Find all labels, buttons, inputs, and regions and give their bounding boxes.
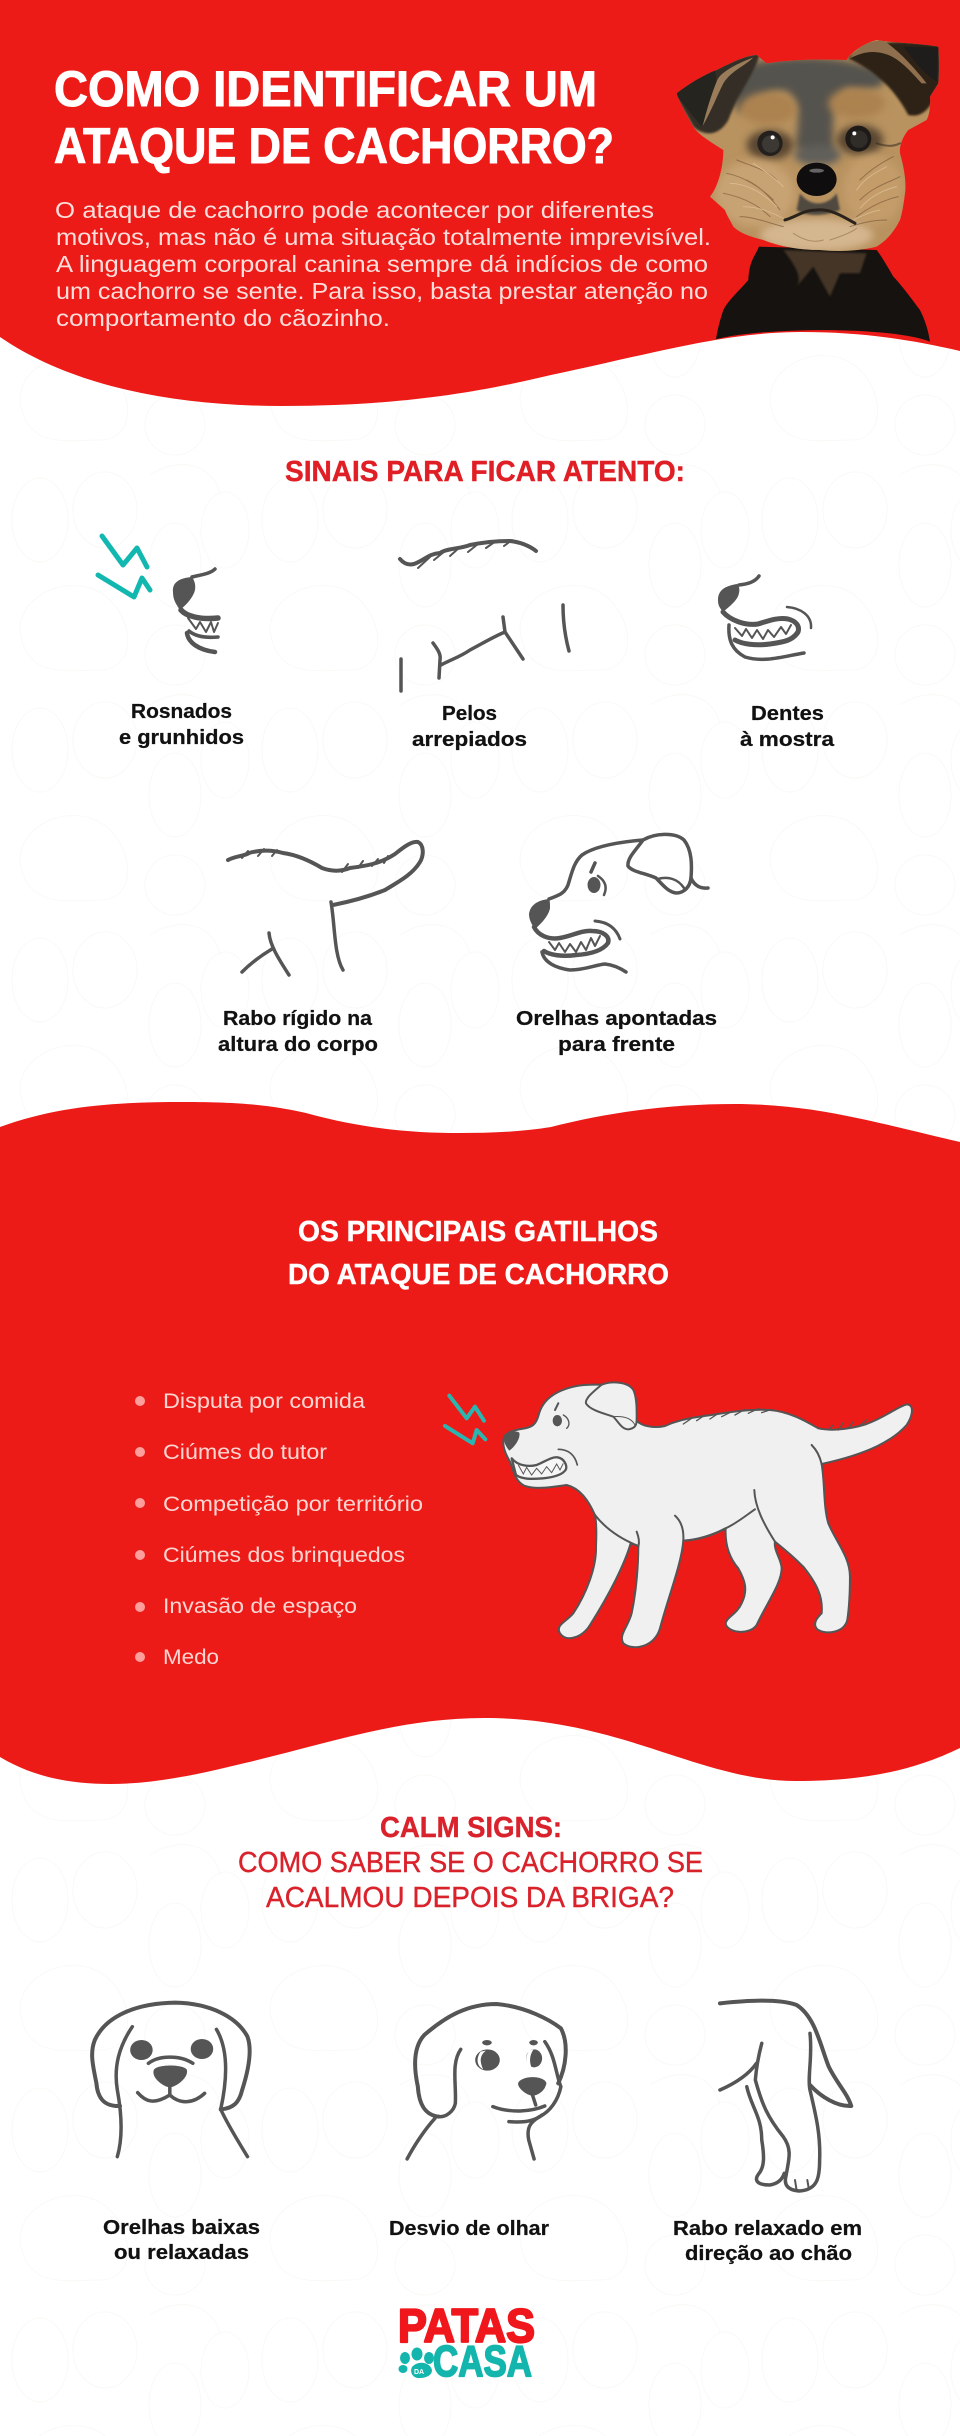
icon: mouth with teeth [718,576,811,659]
label: Pelos [442,703,497,725]
title: ATAQUE DE CACHORRO? [54,118,614,174]
cheeks [715,160,795,227]
label: para frente [558,1034,675,1056]
calm sign 1: relaxed ears [92,2003,260,2264]
calm sign 3: relaxed tail [673,2001,862,2265]
intro text: motivos, mas não é uma situação totalmente imprevisível. [56,224,711,250]
panel: warning signs [98,536,835,1056]
heading: triggers: DO ATAQUE DE CACHORRO [288,1259,669,1291]
icon: front dog face [92,2003,250,2157]
title [54,61,614,174]
heading: signs: SINAIS PARA FICAR ATENTO: [285,456,685,488]
right ear [848,42,940,116]
panel: triggers [0,1102,960,1784]
label: altura do corpo [218,1034,378,1056]
icon: teal paw: DA [414,2369,424,2376]
icon: teal growl marks [445,1396,485,1443]
icon: dog head in profile [529,834,708,972]
heading: calm signs: CALM SIGNS: [380,1812,562,1844]
title: COMO IDENTIFICAR UM [54,61,597,117]
label [740,703,835,751]
label: Orelhas baixas [103,2217,260,2239]
dog mouth [512,1457,566,1479]
label: Dentes [751,703,824,725]
panel: red header [0,0,960,406]
label: à mostra [740,729,835,751]
icon: tail pointing down [720,2001,851,2191]
icon: dog looking aside [407,2004,566,2159]
intro text: A linguagem corporal canina sempre dá indícios de como [56,251,708,277]
trigger list: Ciúmes dos brinquedos [163,1544,405,1567]
trigger list [135,1390,423,1669]
trigger list: Disputa por comida [163,1390,365,1413]
heading: triggers: OS PRINCIPAIS GATILHOS [298,1216,658,1248]
label: Desvio de olhar [389,2218,549,2240]
heading: calm signs: COMO SABER SE O CACHORRO SE [238,1847,703,1879]
intro text: O ataque de cachorro pode acontecer por diferentes [55,197,654,223]
label [119,701,244,749]
icon: yorkshire terrier photo [673,40,940,342]
logo word: casa: CASA [433,2337,532,2386]
icon: dog back with raised fur [400,540,569,691]
intro text [55,197,711,331]
illustration: angry dog [445,1382,912,1647]
sign 5: ears forward [516,834,717,1056]
sign 3: bared teeth [718,576,835,751]
mouth [785,210,855,223]
sign 1: growling [98,536,244,749]
nose [797,163,837,196]
header wave shape [0,0,960,406]
label [673,2218,862,2265]
muzzle grey [793,145,842,165]
label [412,703,527,751]
label: arrepiados [412,729,527,751]
label: Orelhas apontadas [516,1008,717,1030]
trigger list: Competição por território [163,1493,423,1516]
sign 2: raised fur [400,540,569,751]
label: Rosnados [131,701,232,723]
intro text: um cachorro se sente. Para isso, basta prestar atenção no [56,278,708,304]
label [516,1008,717,1056]
tan brows [740,92,797,124]
heading: calm signs: ACALMOU DEPOIS DA BRIGA? [266,1882,674,1914]
icon: snout cropped [173,569,218,652]
label: Rabo relaxado em [673,2218,862,2240]
dark eye surrounds [747,130,793,160]
panel: calm signs [92,1812,862,2265]
left ear [673,53,760,133]
label: direção ao chão [685,2243,852,2265]
fur streaks [723,143,900,241]
label: ou relaxadas [114,2242,249,2264]
dog body [503,1382,912,1647]
heading: calm signs [238,1812,703,1914]
logo word: patas: PATAS [398,2299,535,2352]
trigger list: Invasão de espaço [163,1595,357,1618]
grey crown [734,57,887,157]
intro text: comportamento do cãozinho. [56,305,390,331]
label [218,1008,378,1056]
trigger list: Medo [163,1646,219,1669]
icon: teal growl marks [98,536,150,597]
label: e grunhidos [119,727,244,749]
red wave band [0,1102,960,1784]
heading: triggers [288,1216,669,1291]
sign 4: rigid tail [218,842,423,1056]
trigger list: Ciúmes do tutor [163,1441,327,1464]
eyes [757,131,783,156]
label: Rabo rígido na [223,1008,373,1030]
dog details [555,1385,867,1547]
label [103,2217,260,2264]
logo: Patas da Casa [398,2299,535,2386]
calm sign 2: look away [389,2004,566,2240]
icon: dog rump with stiff tail [228,842,423,975]
